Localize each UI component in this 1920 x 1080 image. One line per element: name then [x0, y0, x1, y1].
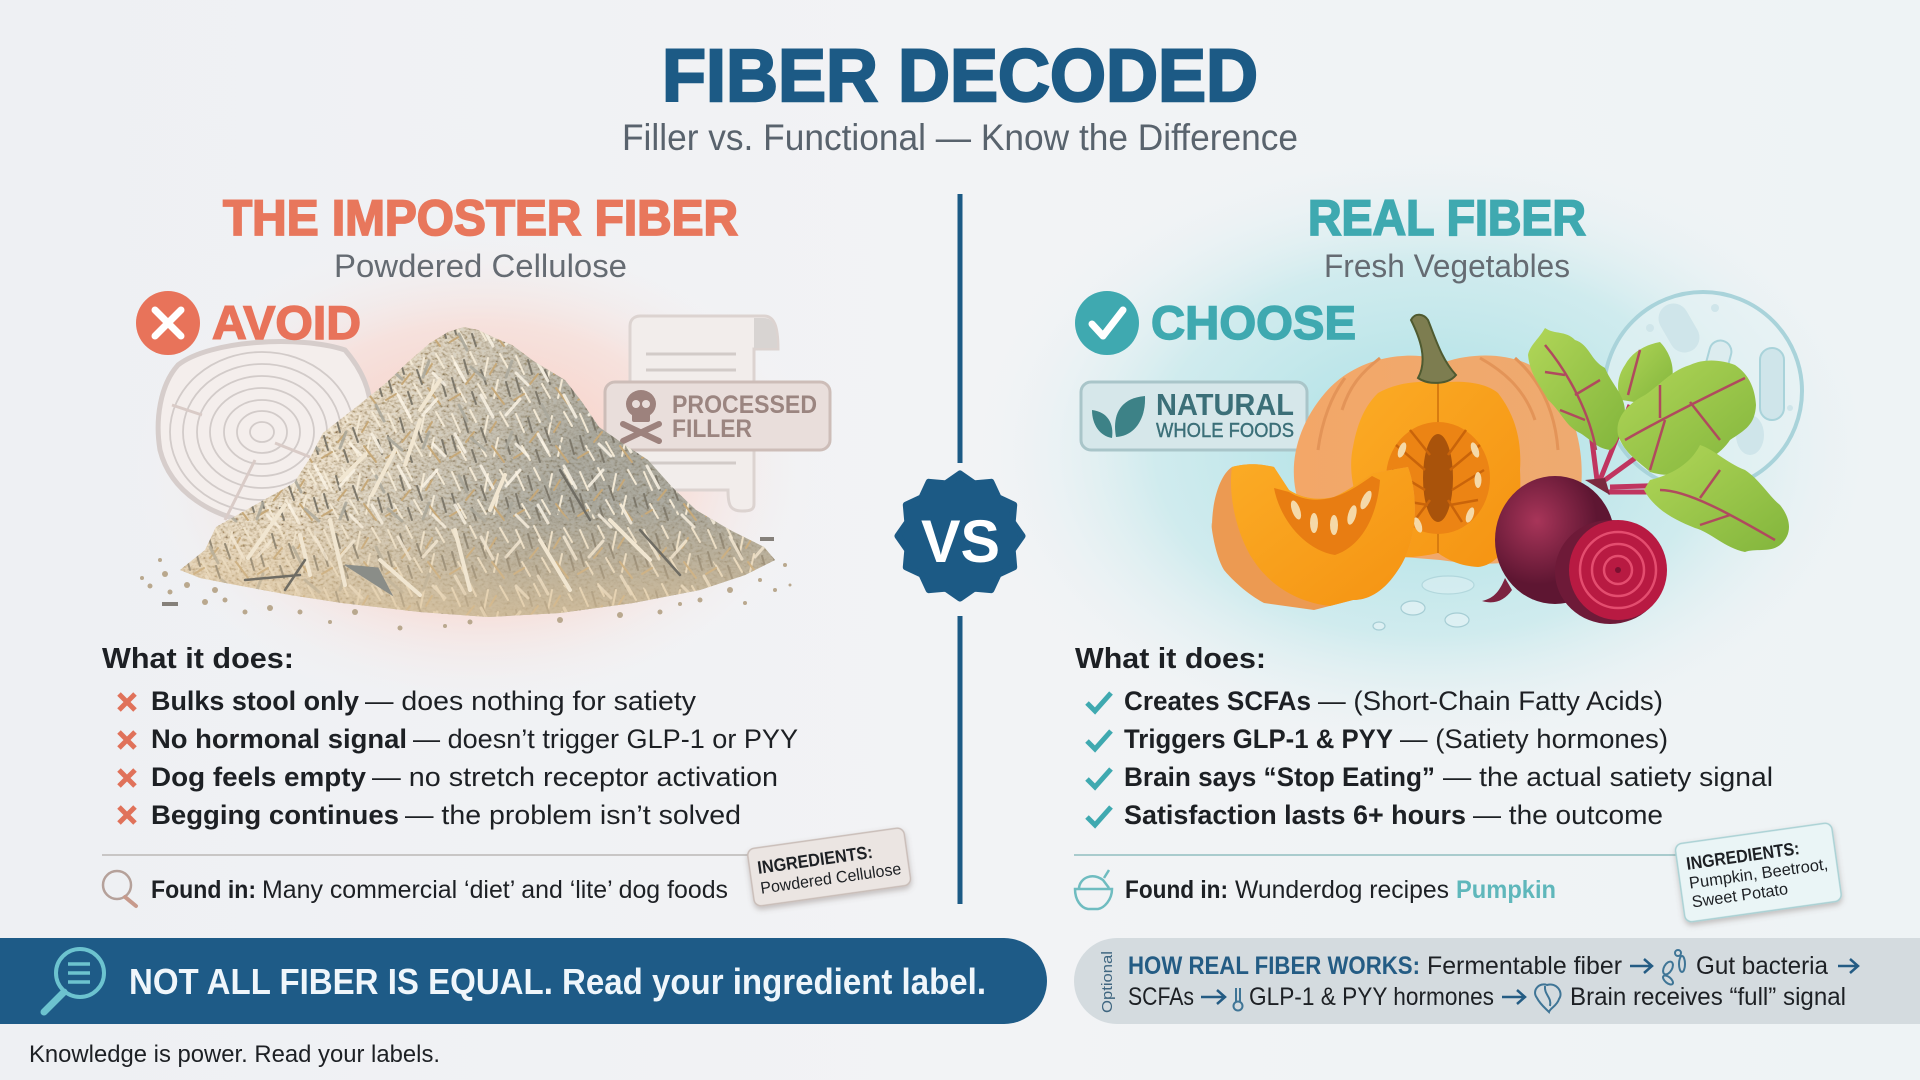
glow: teal behind vegetables: [970, 140, 1890, 760]
heading: the imposter fiber: THE IMPOSTER FIBER: [223, 190, 738, 246]
badge: natural whole foods: WHOLE FOODS: [1156, 420, 1294, 442]
badge: processed filler: PROCESSED: [672, 391, 817, 419]
item: no hormonal signal: [119, 724, 798, 754]
item: creates scfas: Creates SCFAs: [1124, 686, 1311, 716]
footer tagline: Knowledge is power. Read your labels.: [29, 1041, 440, 1068]
divider bottom: [958, 616, 962, 904]
avoid stamp: [136, 291, 361, 355]
heading: what it does (real): What it does:: [1075, 643, 1266, 675]
found in: filler: Found in:: [151, 876, 256, 904]
badge: processed filler: [605, 382, 830, 450]
item: triggers glp-1: Triggers GLP-1 & PYY: [1124, 724, 1393, 754]
ingredient card: real: Pumpkin, Beetroot,: [1688, 855, 1829, 893]
pumpkin stem: [1411, 315, 1456, 383]
found in: filler: Many commercial ‘diet’ and ‘lite’ dog foods: [262, 876, 728, 904]
arrow: [1502, 990, 1525, 1004]
found in: real: Found in:: [1125, 876, 1228, 904]
banner: not all fiber is equal: [0, 938, 1047, 1024]
heading: real fiber: REAL FIBER: [1308, 190, 1586, 246]
rule: [102, 854, 752, 856]
item: satisfaction lasts: — the outcome: [1473, 800, 1663, 830]
arrow: [1838, 959, 1858, 973]
divider top: [958, 194, 962, 463]
illustration: pile of powdered cellulose: [140, 320, 792, 630]
badge: natural whole foods: [1081, 382, 1307, 450]
choose stamp: [1075, 291, 1356, 355]
panel: how real fiber works: SCFAs: [1128, 983, 1194, 1011]
illustration: beet slice: [1555, 520, 1667, 624]
item: brain says stop eating: [1087, 762, 1773, 792]
ingredient card: real: Sweet Potato: [1691, 880, 1789, 911]
ingredient card: real: INGREDIENTS:: [1685, 838, 1801, 874]
illustration: beet leaves: [1528, 328, 1789, 552]
found in: real: Wunderdog recipes: [1235, 876, 1449, 904]
item: dog feels empty: — no stretch receptor activation: [372, 762, 778, 792]
icon: scroll document: [630, 316, 778, 511]
item: satisfaction lasts: [1087, 800, 1663, 830]
badge: natural whole foods: NATURAL: [1156, 387, 1294, 422]
illustration: pumpkin: [1294, 315, 1582, 567]
illustration: beetroot: [1482, 476, 1615, 604]
panel: how real fiber works: [1074, 938, 1920, 1024]
panel: how real fiber works: HOW REAL FIBER WORKS:: [1128, 952, 1420, 980]
item: brain says stop eating: — the actual satiety signal: [1443, 762, 1773, 792]
title: FIBER DECODED: [662, 34, 1258, 117]
icon: food bowl: [1075, 870, 1112, 909]
heading: what it does (filler): What it does:: [102, 643, 294, 675]
list: real fiber effects: [1087, 686, 1773, 830]
subheading: powdered cellulose: Powdered Cellulose: [334, 248, 627, 284]
icon: leaf: [1092, 396, 1145, 438]
ingredient card: filler: INGREDIENTS:: [756, 842, 874, 878]
ingredient card: filler: Powdered Cellulose: [759, 860, 902, 898]
item: creates scfas: — (Short-Chain Fatty Acids): [1318, 686, 1663, 716]
panel: how real fiber works: Fermentable fiber: [1427, 952, 1622, 980]
ingredient card: real: [1675, 822, 1842, 923]
water droplets: [1373, 576, 1474, 630]
item: bulks stool: — does nothing for satiety: [365, 686, 697, 716]
glow: pink behind filler: [130, 225, 830, 715]
item: creates scfas: [1087, 686, 1663, 716]
avoid stamp: AVOID: [212, 296, 361, 349]
found in: filler: [103, 871, 728, 906]
panel: real fiber: [1074, 190, 1842, 923]
arrow: [1201, 990, 1225, 1004]
ingredient card: filler: [747, 827, 911, 907]
item: no hormonal signal: — doesn’t trigger GLP-1 or PYY: [413, 724, 798, 754]
badge: processed filler: FILLER: [672, 415, 752, 443]
icon: thermometer: [1234, 988, 1242, 1010]
icon: gut bacteria: [1661, 950, 1685, 986]
panel: how real fiber works: GLP-1 & PYY hormones: [1249, 983, 1494, 1011]
illustration: pumpkin slice: [1211, 464, 1415, 610]
item: no hormonal signal: No hormonal signal: [151, 724, 407, 754]
VS badge: [898, 474, 1022, 598]
found in: real: [1075, 870, 1556, 909]
item: dog feels empty: [119, 762, 778, 792]
item: bulks stool: [119, 686, 697, 716]
icon: gut bacteria circle: [1604, 292, 1802, 490]
item: begging continues: Begging continues: [151, 800, 399, 830]
banner: not all fiber is equal: NOT ALL FIBER IS EQUAL. Read your ingredient label.: [129, 961, 986, 1002]
panel: how real fiber works: Gut bacteria: [1696, 952, 1828, 980]
VS badge: VS: [921, 508, 1000, 575]
item: satisfaction lasts: Satisfaction lasts 6+ hours: [1124, 800, 1466, 830]
list: filler effects: [119, 686, 798, 830]
icon: brain: [1535, 984, 1561, 1012]
choose stamp: CHOOSE: [1151, 296, 1356, 349]
icon: check circle: [1075, 291, 1139, 355]
item: dog feels empty: Dog feels empty: [151, 762, 366, 792]
icon: x circle: [136, 291, 200, 355]
panel: how real fiber works: Brain receives “full” signal: [1570, 983, 1846, 1011]
item: triggers glp-1: — (Satiety hormones): [1400, 724, 1668, 754]
panel: imposter fiber: [102, 190, 911, 907]
found in: real: Pumpkin: [1456, 876, 1556, 904]
item: triggers glp-1: [1087, 724, 1668, 754]
item: begging continues: [119, 800, 741, 830]
icon: skull and crossbones: [623, 390, 659, 441]
icon: magnifier: [103, 871, 136, 906]
item: brain says stop eating: Brain says “Stop Eating”: [1124, 762, 1435, 792]
item: begging continues: — the problem isn’t solved: [405, 800, 741, 830]
rule: [1074, 854, 1686, 856]
label: optional: Optional: [1099, 951, 1116, 1013]
icon: wood rings: [158, 342, 371, 525]
subheading: fresh vegetables: Fresh Vegetables: [1324, 248, 1570, 284]
arrow: [1630, 959, 1652, 973]
subtitle: Filler vs. Functional — Know the Difference: [622, 117, 1298, 158]
icon: magnifier with list: [44, 949, 104, 1012]
item: bulks stool: Bulks stool only: [151, 686, 359, 716]
